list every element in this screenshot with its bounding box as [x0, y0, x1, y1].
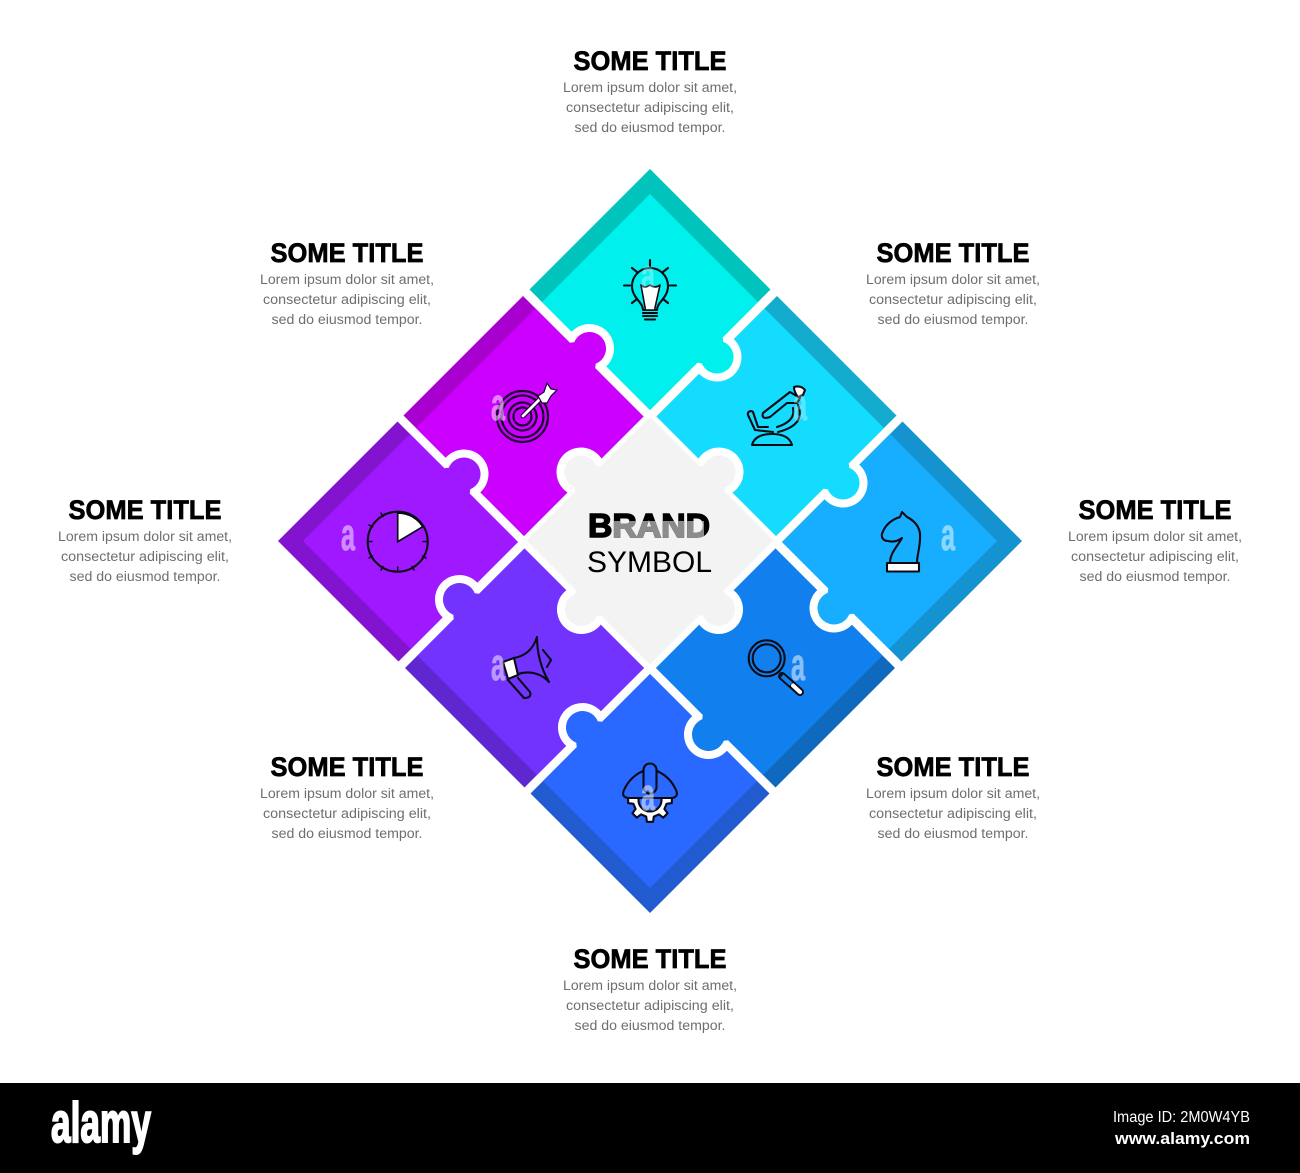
text block: upper left: SOME TITLE — [270, 238, 424, 268]
tab: purple into magenta — [432, 444, 494, 506]
piece: magenta — [404, 296, 644, 536]
tab: center upper right — [687, 442, 749, 504]
text block: upper left: sed do eiusmod tempor. — [272, 312, 422, 327]
text block: bottom: SOME TITLE — [574, 944, 726, 974]
text block: right: SOME TITLE — [1078, 495, 1232, 525]
text block: lower left: Lorem ipsum dolor sit amet, — [260, 786, 434, 801]
image id: Image ID: 2M0W4YB — [1113, 1109, 1250, 1126]
piece: top cyan — [530, 169, 770, 410]
text block: upper right: sed do eiusmod tempor. — [878, 312, 1028, 327]
text block: lower right: sed do eiusmod tempor. — [878, 826, 1028, 841]
text block: upper right: SOME TITLE — [876, 238, 1030, 268]
tab: center lower left — [551, 578, 613, 640]
text block: lower left: SOME TITLE — [270, 752, 424, 782]
footer bar — [0, 1083, 1300, 1173]
text block: lower right — [866, 752, 1040, 841]
icon: light bulb — [624, 260, 676, 320]
watermark letters: a — [491, 639, 506, 690]
piece: center — [526, 417, 774, 664]
tab: blue into royal blue — [678, 703, 740, 765]
text block: left: consectetur adipiscing elit, — [61, 549, 229, 564]
piece: violet — [405, 548, 644, 788]
icon: clock — [368, 512, 428, 572]
watermark letters: a — [941, 509, 956, 560]
tab: center upper left — [551, 442, 613, 504]
text block: lower left: sed do eiusmod tempor. — [272, 826, 422, 841]
footer logo: alamy — [51, 1091, 151, 1155]
text block: top — [563, 46, 737, 135]
text block: upper right — [866, 238, 1040, 327]
text block: top: sed do eiusmod tempor. — [574, 120, 726, 135]
tab: magenta into cyan — [558, 318, 620, 380]
piece: right sky blue — [782, 422, 1022, 662]
watermark letters: a — [491, 379, 506, 430]
text block: upper left — [260, 238, 434, 327]
center brand symbol text: BRAND — [588, 508, 710, 545]
icon: microscope — [748, 386, 805, 445]
center brand symbol text: BRAND — [588, 508, 710, 545]
watermark letters — [341, 250, 956, 820]
text block: lower left — [260, 752, 434, 841]
text block: top: consectetur adipiscing elit, — [566, 100, 734, 115]
text block: lower right: Lorem ipsum dolor sit amet, — [866, 786, 1040, 801]
text block: right: Lorem ipsum dolor sit amet, — [1068, 529, 1242, 544]
tab: light cyan into sky blue — [811, 451, 873, 513]
text block: upper left: consectetur adipiscing elit, — [263, 292, 431, 307]
text block: lower right: SOME TITLE — [876, 752, 1030, 782]
icon: knight chess piece — [882, 512, 920, 572]
watermark letters: a — [341, 509, 356, 560]
piece: blue — [656, 548, 895, 788]
tab: sky blue into blue — [804, 576, 866, 638]
text block: left — [58, 495, 232, 584]
text block: upper right: Lorem ipsum dolor sit amet, — [866, 272, 1040, 287]
text block: left: Lorem ipsum dolor sit amet, — [58, 529, 232, 544]
piece: light cyan — [656, 296, 896, 536]
text block: bottom: Lorem ipsum dolor sit amet, — [563, 978, 737, 993]
watermark letters: a — [791, 639, 806, 690]
tab: royal blue into violet — [552, 697, 614, 759]
center brand symbol text: SYMBOL — [587, 546, 712, 579]
text block: lower left: consectetur adipiscing elit, — [263, 806, 431, 821]
text block: bottom: consectetur adipiscing elit, — [566, 998, 734, 1013]
puzzle diagram — [278, 169, 1022, 913]
text block: top: Lorem ipsum dolor sit amet, — [563, 80, 737, 95]
watermark letters: a — [793, 379, 808, 430]
icon: magnifying glass — [749, 640, 800, 692]
piece: left purple — [278, 422, 518, 662]
icon: megaphone — [503, 637, 551, 698]
watermark letters: a — [641, 769, 656, 820]
website: www.alamy.com — [1114, 1129, 1250, 1148]
text block: right: sed do eiusmod tempor. — [1080, 569, 1230, 584]
text block: upper right: consectetur adipiscing elit, — [869, 292, 1037, 307]
text block: bottom — [563, 944, 737, 1033]
text block: right: consectetur adipiscing elit, — [1071, 549, 1239, 564]
watermark letters: a — [641, 250, 656, 301]
text block: upper left: Lorem ipsum dolor sit amet, — [260, 272, 434, 287]
tab: center lower right — [687, 578, 749, 640]
text block: left: SOME TITLE — [68, 495, 222, 525]
icon: helmet and gear — [623, 764, 677, 822]
text block: bottom: sed do eiusmod tempor. — [574, 1018, 726, 1033]
piece: bottom royal blue — [530, 674, 770, 913]
text block: lower right: consectetur adipiscing elit, — [869, 806, 1037, 821]
tab: cyan into light cyan — [685, 325, 747, 387]
icon: target with dart — [497, 383, 557, 442]
tab: violet into purple — [429, 569, 491, 631]
text block: left: sed do eiusmod tempor. — [70, 569, 220, 584]
center brand symbol text — [588, 513, 712, 572]
text block: right — [1068, 495, 1242, 584]
text block: top: SOME TITLE — [574, 46, 726, 76]
